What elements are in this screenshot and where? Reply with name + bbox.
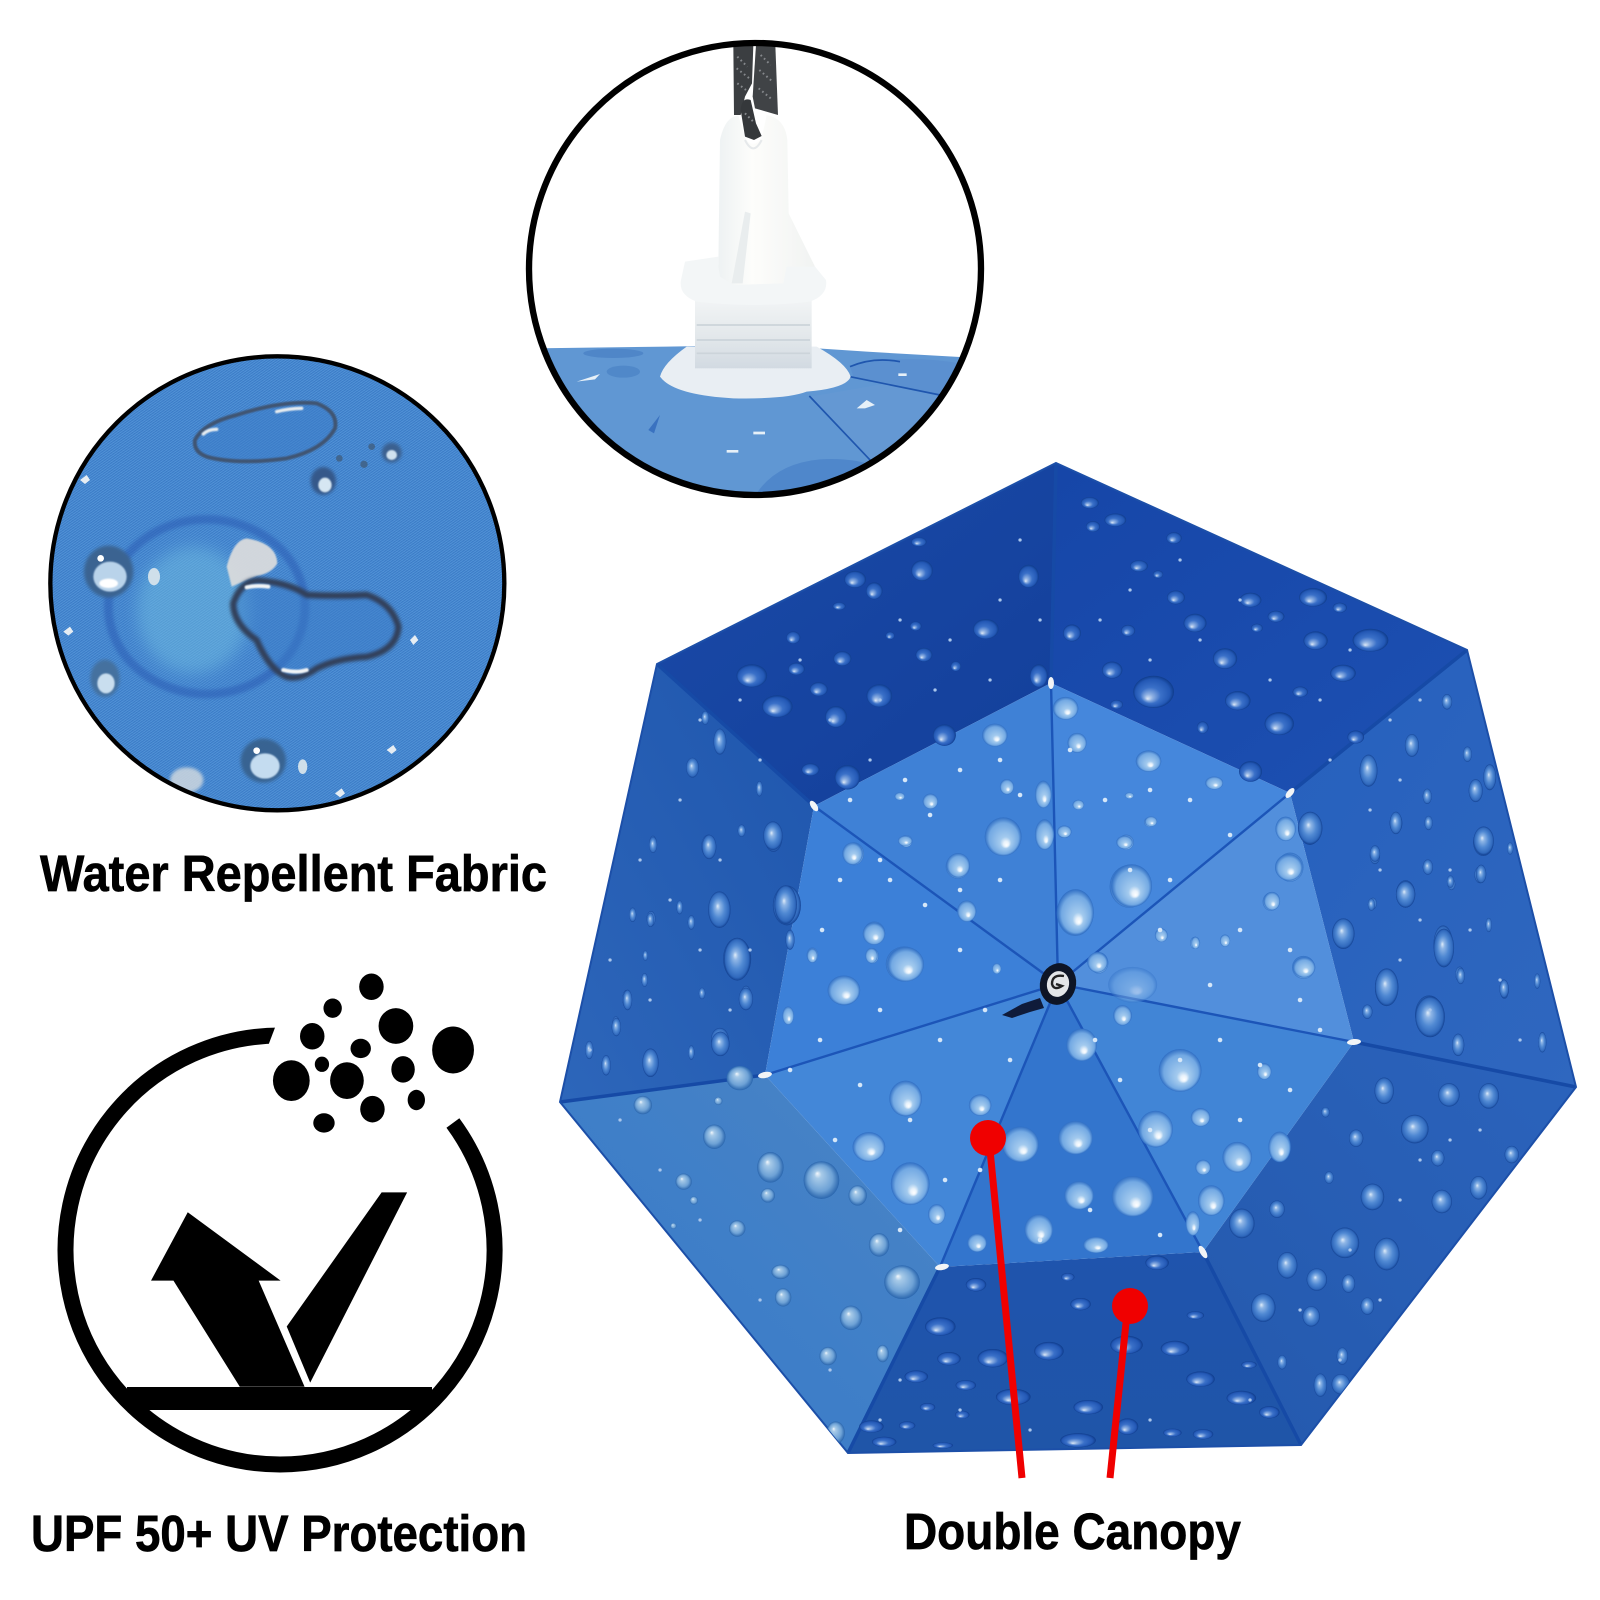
- drops on inner canopy lower half: [807, 816, 1315, 1253]
- umbrella double canopy: [560, 463, 1576, 1453]
- heading: water repellent fabric: Water Repellent Fabric: [40, 845, 547, 902]
- pointer to outer canopy: [1110, 1288, 1148, 1478]
- drops on inner canopy upper half: [782, 697, 1315, 1025]
- badge ring: [66, 1036, 495, 1464]
- drops on top-left outer panel: [736, 497, 1388, 789]
- ground bar: [127, 1387, 432, 1410]
- small water beads: [84, 443, 402, 783]
- small outer canopy specks: [590, 540, 1520, 1430]
- small white specks: [790, 750, 1320, 1250]
- canopy ribs: [560, 463, 1576, 1453]
- inner canopy edge tips: [758, 677, 1361, 1271]
- center hub knob: [1002, 959, 1081, 1018]
- top circle ring: [529, 43, 981, 495]
- heading: UPF 50+ UV protection: UPF 50+ UV Protection: [31, 1505, 527, 1562]
- plastic plug collar: [681, 257, 826, 305]
- water bead outline upper: [195, 403, 335, 461]
- plastic plug base flange: [660, 347, 851, 398]
- drops on lower-right outer panel: [1229, 812, 1546, 1397]
- icon: UPF sun protection badge: [66, 973, 495, 1464]
- drops on side outer panels: [612, 694, 1509, 1051]
- pointer to inner canopy: [970, 1120, 1022, 1478]
- panel: water repellent fabric circle: [47, 353, 513, 820]
- panel: top detail circle, hanging clip: [529, 43, 983, 507]
- inner canopy panels: [765, 683, 1354, 1267]
- heading: double canopy: Double Canopy: [904, 1503, 1242, 1560]
- water drops printed on canopy: [585, 497, 1546, 1448]
- drops on bottom outer panel: [859, 1256, 1280, 1448]
- plastic plug stem: [718, 115, 815, 285]
- fabric close-up: [47, 353, 513, 820]
- plastic plug threaded neck: [695, 297, 812, 368]
- fabric visible in circle: [546, 346, 960, 492]
- water bead blob center: [233, 581, 398, 677]
- arrow and check mark: [151, 1192, 407, 1387]
- drops on left outer panel lower part: [585, 821, 797, 1077]
- particles deflected: [273, 973, 474, 1133]
- rope cord: [733, 45, 778, 140]
- left circle ring: [50, 356, 504, 810]
- drops on lower-left outer panel: [634, 1066, 920, 1444]
- callout: red pointers to double canopy: [970, 1120, 1148, 1478]
- outer canopy panels: [560, 463, 1576, 1453]
